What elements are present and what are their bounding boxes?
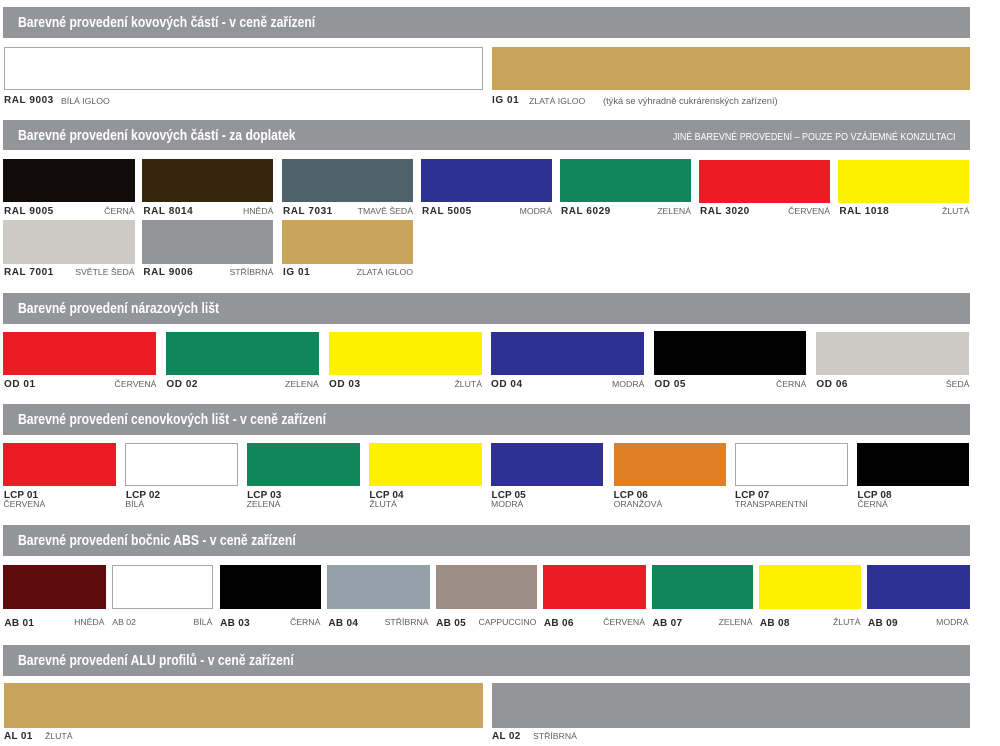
swatch: OD 05: OD 05 xyxy=(654,379,686,390)
swatch: LCP 06 xyxy=(614,443,726,509)
swatch: RAL 9006: STŘÍBRNÁ xyxy=(229,267,273,277)
swatch: RAL 7001: SVĚTLE ŠEDÁ xyxy=(75,267,135,277)
swatch: LCP 08: LCP 08 xyxy=(857,490,892,501)
swatch: AB 01: AB 01 xyxy=(4,618,34,629)
swatch: RAL 6029 xyxy=(560,159,691,217)
swatch: AB 05 xyxy=(436,565,537,629)
swatch: AB 02: AB 02 xyxy=(112,617,136,627)
swatch: LCP 03: LCP 03 xyxy=(247,490,281,501)
swatch: OD 04 xyxy=(491,332,644,390)
swatch: IG 01: ZLATÁ IGLOO xyxy=(529,96,585,106)
swatch: OD 06: OD 06 xyxy=(816,379,848,390)
swatch: RAL 3020 xyxy=(699,160,830,217)
swatch: AB 03: AB 03 xyxy=(220,618,250,629)
swatch: OD 05: ČERNÁ xyxy=(776,379,806,389)
swatch: RAL 7001: RAL 7001 xyxy=(4,267,54,278)
swatch: OD 04: OD 04 xyxy=(491,379,523,390)
swatch: RAL 9003: RAL 9003 xyxy=(4,95,54,106)
swatch: RAL 7031: TMAVĚ ŠEDÁ xyxy=(358,206,413,216)
swatch: AB 04: STŘÍBRNÁ xyxy=(385,617,429,627)
swatch: AL 01 xyxy=(4,683,483,742)
swatch: AB 07: AB 07 xyxy=(652,618,682,629)
swatch: LCP 07 xyxy=(735,443,848,509)
header: cenovkové lišty xyxy=(3,404,970,435)
swatch: IG 01 xyxy=(282,220,413,278)
swatch: OD 02: OD 02 xyxy=(166,379,198,390)
swatch: RAL 9006 xyxy=(142,220,274,278)
swatch: AB 02: BÍLÁ xyxy=(194,617,212,627)
swatch: LCP 05: MODRÁ xyxy=(491,499,523,509)
swatch: RAL 8014 xyxy=(142,159,274,217)
swatch: LCP 02: LCP 02 xyxy=(126,490,160,501)
swatch: LCP 01 xyxy=(3,443,116,509)
swatch: LCP 04: LCP 04 xyxy=(369,490,404,501)
swatch: AB 09: MODRÁ xyxy=(936,617,968,627)
swatch: OD 06: ŠEDÁ xyxy=(946,379,969,389)
swatch: LCP 04 xyxy=(369,443,482,509)
swatch: LCP 08: ČERNÁ xyxy=(857,499,888,509)
swatch: RAL 7031 xyxy=(282,159,413,217)
swatch: AB 06: ČERVENÁ xyxy=(603,617,645,627)
swatch: AL 02: STŘÍBRNÁ xyxy=(533,731,577,741)
header: ALU profily: Barevné provedení ALU profilů - v ceně zařízení xyxy=(18,653,294,669)
swatch: OD 03: OD 03 xyxy=(329,379,361,390)
swatch: AB 03 xyxy=(220,565,321,629)
header: kovové části za doplatek xyxy=(3,120,970,150)
swatch: AB 05: AB 05 xyxy=(436,618,466,629)
swatch: AB 08: AB 08 xyxy=(760,618,790,629)
swatch: OD 01 xyxy=(3,332,156,390)
swatch: LCP 06: LCP 06 xyxy=(614,490,648,501)
swatch: LCP 07: LCP 07 xyxy=(735,490,769,501)
swatch: OD 02: ZELENÁ xyxy=(285,379,319,389)
header: cenovkové lišty: Barevné provedení cenovkových lišt - v ceně zařízení xyxy=(18,412,326,428)
swatch: IG 01: (týká se výhradně cukrárenských zařízení) xyxy=(603,96,778,106)
swatch: RAL 1018: RAL 1018 xyxy=(839,206,889,217)
swatch: OD 04: MODRÁ xyxy=(612,379,644,389)
swatch: IG 01 xyxy=(492,47,970,106)
swatch: AB 07 xyxy=(652,565,753,629)
swatch: OD 01: ČERVENÁ xyxy=(115,379,156,389)
swatch: AL 02: AL 02 xyxy=(492,731,521,742)
swatch: RAL 9003: BÍLÁ IGLOO xyxy=(61,96,110,106)
swatch: LCP 01: ČERVENÁ xyxy=(3,499,45,509)
swatch: RAL 5005: RAL 5005 xyxy=(422,206,472,217)
swatch: LCP 05 xyxy=(491,443,603,509)
swatch: AB 07: ZELENÁ xyxy=(719,617,752,627)
header: kovové části v ceně xyxy=(3,7,970,38)
swatch: RAL 8014: RAL 8014 xyxy=(143,206,193,217)
swatch: LCP 07: TRANSPARENTNÍ xyxy=(735,499,808,509)
swatch: AB 06: AB 06 xyxy=(544,618,574,629)
swatch: LCP 02 xyxy=(125,443,238,509)
swatch: AB 03: ČERNÁ xyxy=(290,617,320,627)
swatch: OD 03: ŽLUTÁ xyxy=(454,379,482,389)
swatch: AB 01: HNĚDÁ xyxy=(74,617,104,627)
swatch: OD 01: OD 01 xyxy=(4,379,36,390)
swatch: AB 04: AB 04 xyxy=(328,618,358,629)
swatch: OD 06 xyxy=(816,332,970,390)
swatch: LCP 05: LCP 05 xyxy=(492,490,526,501)
swatch: RAL 8014: HNĚDÁ xyxy=(243,206,273,216)
swatch: IG 01: IG 01 xyxy=(492,95,519,106)
swatch: IG 01: IG 01 xyxy=(283,267,310,278)
swatch: LCP 02: BÍLÁ xyxy=(125,499,144,509)
swatch: RAL 9003 xyxy=(4,47,483,106)
swatch: RAL 3020: RAL 3020 xyxy=(700,206,750,217)
swatch: AL 01: AL 01 xyxy=(4,731,33,742)
header: nárazové lišty xyxy=(3,293,970,324)
swatch: AB 06 xyxy=(543,565,646,629)
header: kovové části za doplatek: Barevné provedení kovových částí - za doplatek xyxy=(18,128,296,144)
swatch: RAL 1018 xyxy=(838,160,970,217)
swatch: AB 09 xyxy=(867,565,970,629)
header: ALU profily xyxy=(3,645,970,676)
swatch: AB 05: CAPPUCCINO xyxy=(478,617,536,627)
header: bočnice ABS xyxy=(3,525,970,556)
swatch: RAL 9006: RAL 9006 xyxy=(143,267,193,278)
header: nárazové lišty: Barevné provedení nárazových lišt xyxy=(18,301,219,317)
swatch: RAL 7031: RAL 7031 xyxy=(283,206,333,217)
swatch: LCP 08 xyxy=(857,443,969,509)
swatch: AB 08: ŽLUTÁ xyxy=(833,617,860,627)
swatch: AL 02 xyxy=(492,683,970,742)
swatch: AB 04 xyxy=(327,565,430,629)
swatch: RAL 9005: ČERNÁ xyxy=(104,206,135,216)
swatch: LCP 01: LCP 01 xyxy=(4,490,38,501)
swatch: RAL 3020: ČERVENÁ xyxy=(788,206,830,216)
header: kovové části za doplatek: JINÉ BAREVNÉ PROVEDENÍ – POUZE PO VZÁJEMNÉ KONZULTACI xyxy=(673,132,956,143)
swatch: RAL 5005: MODRÁ xyxy=(520,206,552,216)
swatch: AB 01 xyxy=(3,565,106,629)
swatch: AL 01: ŽLUTÁ xyxy=(45,731,73,741)
swatch: AB 08 xyxy=(759,565,861,629)
swatch: RAL 5005 xyxy=(421,159,552,217)
swatch: IG 01: ZLATÁ IGLOO xyxy=(357,267,413,277)
header: bočnice ABS: Barevné provedení bočnic ABS - v ceně zařízení xyxy=(18,533,296,549)
swatch: LCP 03: ZELENÁ xyxy=(247,499,280,509)
swatch: LCP 03 xyxy=(246,443,360,509)
swatch: OD 02 xyxy=(166,332,319,390)
swatch: OD 03 xyxy=(329,332,482,390)
swatch: AB 02 xyxy=(112,565,213,627)
swatch: RAL 6029: ZELENÁ xyxy=(657,206,691,216)
swatch: RAL 9005 xyxy=(3,159,135,217)
swatch: RAL 6029: RAL 6029 xyxy=(561,206,611,217)
swatch: RAL 7001 xyxy=(3,220,135,278)
swatch: AB 09: AB 09 xyxy=(868,618,898,629)
header: kovové části v ceně: Barevné provedení kovových částí - v ceně zařízení xyxy=(18,15,315,31)
swatch: RAL 9005: RAL 9005 xyxy=(4,206,54,217)
swatch: RAL 1018: ŽLUTÁ xyxy=(942,206,969,216)
swatch: LCP 06: ORANŽOVÁ xyxy=(614,499,662,509)
swatch: LCP 04: ŽLUTÁ xyxy=(369,499,397,509)
swatch: OD 05 xyxy=(654,331,806,390)
